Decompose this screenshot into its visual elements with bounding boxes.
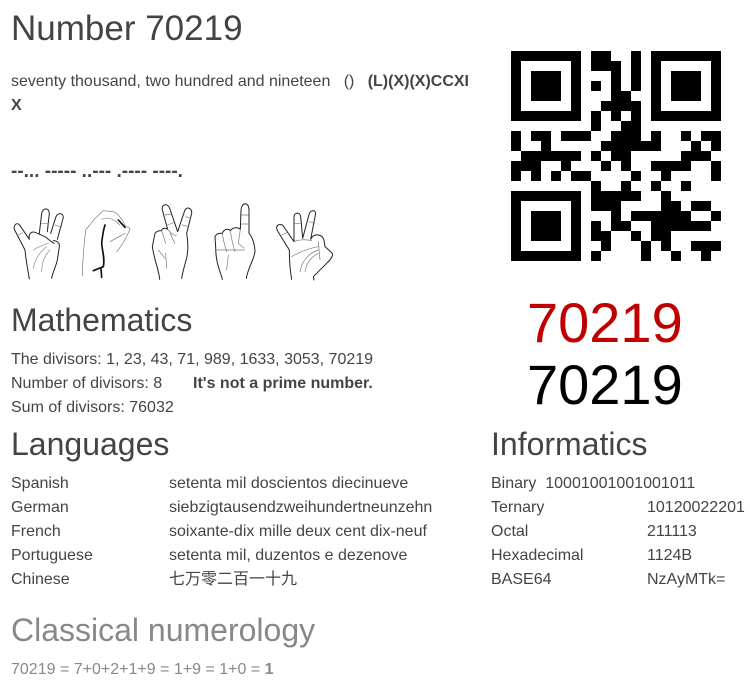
sign language hands (14, 203, 333, 280)
languages heading: Languages (11, 426, 169, 462)
informatics table: NzAyMTk= (647, 571, 725, 588)
informatics table: Octal (491, 523, 528, 540)
number in words and roman numeral (11, 73, 469, 114)
large red number: 70219 (527, 291, 683, 354)
icon: hand sign 0 (82, 211, 130, 277)
large black number: 70219 (527, 353, 683, 416)
number in words and roman numeral: seventy thousand, two hundred and nineteen () (L)(X)(X)CCXI (11, 73, 469, 90)
informatics heading: Informatics (491, 426, 647, 462)
divisors list: The divisors: 1, 23, 43, 71, 989, 1633, 3053, 70219 (11, 351, 373, 368)
informatics table: 211113 (647, 523, 697, 540)
languages table: siebzigtausendzweihundertneunzehn (169, 499, 432, 516)
mathematics heading: Mathematics (11, 302, 192, 338)
number of divisors and prime status (11, 375, 373, 392)
languages table: 七万零二百一十九 (169, 571, 297, 588)
icon: hand sign 2 (152, 205, 192, 279)
numerology calculation: 70219 = 7+0+2+1+9 = 1+9 = 1+0 = 1 (11, 661, 273, 678)
icon: hand sign 7 (14, 209, 63, 279)
QR code (511, 51, 721, 261)
informatics table: Hexadecimal (491, 547, 583, 564)
number of divisors and prime status: Number of divisors: 8 (11, 375, 162, 392)
sum of divisors: Sum of divisors: 76032 (11, 399, 174, 416)
classical numerology heading: Classical numerology (11, 612, 315, 648)
languages table: German (11, 499, 69, 516)
languages table: soixante-dix mille deux cent dix-neuf (169, 523, 427, 540)
languages table: setenta mil doscientos diecinueve (169, 475, 408, 492)
icon: hand sign 1 (215, 204, 255, 279)
languages table: Chinese (11, 571, 70, 588)
icon: hand sign 9 (277, 211, 333, 280)
informatics table: 1124B (647, 547, 692, 564)
morse code: --... ----- ..--- .---- ----. (11, 161, 183, 182)
languages table (11, 475, 432, 588)
informatics table: BASE64 (491, 571, 551, 588)
informatics table: Ternary (491, 499, 544, 516)
number of divisors and prime status: It's not a prime number. (193, 375, 373, 392)
informatics table: Binary 10001001001001011 (491, 475, 695, 492)
number in words and roman numeral: X (11, 97, 22, 114)
languages table: Spanish (11, 475, 69, 492)
informatics table: 10120022201 (647, 499, 745, 516)
languages table: Portuguese (11, 547, 93, 564)
languages table: setenta mil, duzentos e dezenove (169, 547, 407, 564)
informatics table (491, 475, 745, 588)
languages table: French (11, 523, 61, 540)
title: Number 70219 (11, 9, 243, 48)
